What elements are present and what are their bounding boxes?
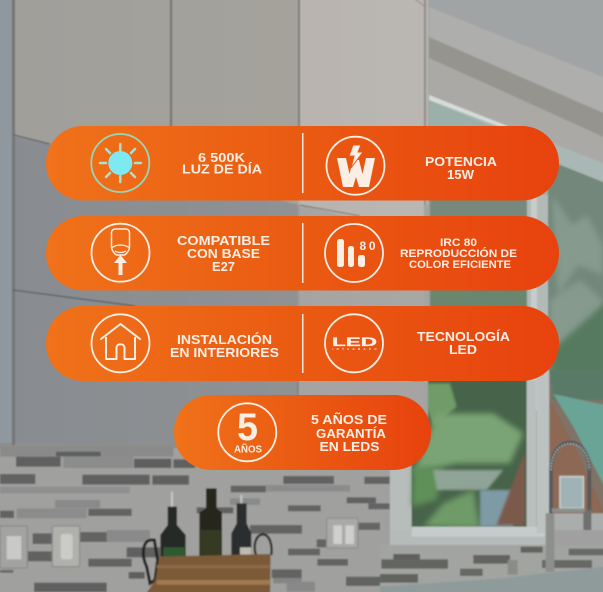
text: 6500K daylight: 6 500K [198,151,245,165]
panel: row 3 pill [46,306,559,381]
text: 6500K daylight [182,151,262,176]
text: 5 year warranty: 5 AÑOS DE [311,412,387,427]
backsplash tiles [0,443,395,592]
panel: row 2 pill [46,216,559,290]
icon: daylight sun [91,134,149,192]
ceiling and trim [426,0,603,200]
panel: row 1 pill [46,126,559,200]
cabinet edge and panel lines [12,0,428,445]
icon: 5 year warranty [218,403,276,461]
text: LED technology [417,329,510,357]
icon: house [92,314,150,372]
icon: CRI 80 bars: 80 [360,239,376,253]
window view: lower [380,370,603,592]
text: CRI 80: COLOR EFICIENTE [409,259,511,271]
icon: integrated LED: LED [332,337,377,349]
bottles and wooden crate [143,488,272,592]
panel: warranty pill [174,395,431,470]
divider row 2 [302,223,304,283]
text: 6500K daylight: LUZ DE DÍA [182,161,262,176]
text: 5 year warranty [311,412,387,454]
icon: CRI 80 bars [325,224,383,282]
icon: wattage W with bolt [326,137,384,195]
icon: E27 bulb base [92,224,150,282]
icon: integrated LED: INTEGRADO [332,347,377,351]
text: 5 year warranty: GARANTÍA [316,426,386,441]
text: CRI 80: IRC 80 [440,237,477,249]
text: CRI 80 [400,237,517,271]
text: 5 year warranty: EN LEDS [320,440,380,454]
text: compatible base E27: CON BASE [187,247,260,261]
divider row 3 [302,314,304,373]
text: power 15W [425,155,497,182]
text: indoor installation: EN INTERIORES [170,346,279,360]
text: power 15W: 15W [447,168,474,182]
text: indoor installation [170,332,279,360]
icon: 5 year warranty: 5 [237,406,258,449]
icon: integrated LED [325,314,383,372]
text: LED technology: TECNOLOGÍA [417,329,510,344]
lower cabinets [14,136,428,450]
text: indoor installation: INSTALACIÓN [177,332,272,347]
text: power 15W: POTENCIA [425,155,497,169]
divider row 1 [302,133,304,193]
wall outlets [0,518,358,568]
text: LED technology: LED [449,343,477,357]
icon: 5 year warranty: AÑOS [234,442,262,456]
text: compatible base E27: COMPATIBLE [177,234,270,248]
window view: upper right [430,160,603,410]
text: compatible base E27: E27 [212,260,235,274]
text: compatible base E27 [177,234,270,274]
text: CRI 80: REPRODUCCIÓN DE [400,247,517,260]
upper cabinets [14,0,428,255]
left wall strip [0,0,14,460]
